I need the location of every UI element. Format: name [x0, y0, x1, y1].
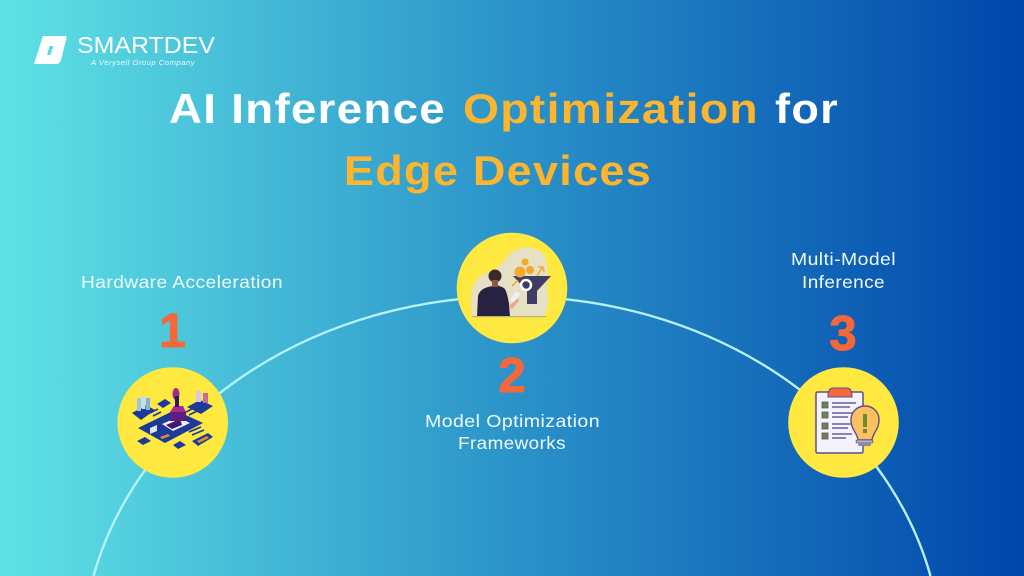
title: Edge Devices — [344, 147, 652, 194]
step 3 label: Inference — [802, 272, 885, 292]
icon: person with funnel and coins — [471, 248, 551, 317]
step 2 label: Model Optimization — [425, 411, 600, 431]
step 1 number: 1 — [159, 305, 186, 358]
icon: isometric hardware platform — [132, 388, 213, 449]
logo tagline: A Verysell Group Company — [90, 60, 195, 67]
title — [169, 85, 839, 194]
title: Optimization — [463, 85, 759, 132]
step 1 circle — [117, 367, 228, 478]
step 2 number: 2 — [498, 349, 526, 403]
step 1: hardware acceleration — [81, 272, 283, 478]
title: for — [775, 85, 839, 132]
step 3: multi-model inference — [788, 249, 899, 478]
step 2 label — [425, 411, 600, 453]
step 3 number: 3 — [829, 307, 857, 361]
step 2: model optimization frameworks — [425, 233, 600, 453]
logo wordmark: SMARTDEV — [77, 32, 215, 58]
step 2 label: Frameworks — [458, 433, 566, 453]
step 3 label: Multi-Model — [791, 249, 896, 269]
step 1 label: Hardware Acceleration — [81, 272, 283, 292]
step 3 circle — [788, 367, 899, 478]
step 2 circle — [457, 233, 567, 343]
step 3 label — [791, 249, 896, 292]
logo — [34, 32, 215, 67]
icon: checklist and light bulb — [816, 388, 879, 453]
arc connecting the steps — [94, 296, 930, 576]
title: AI Inference — [169, 85, 446, 132]
icon: logo mark — [34, 36, 67, 64]
